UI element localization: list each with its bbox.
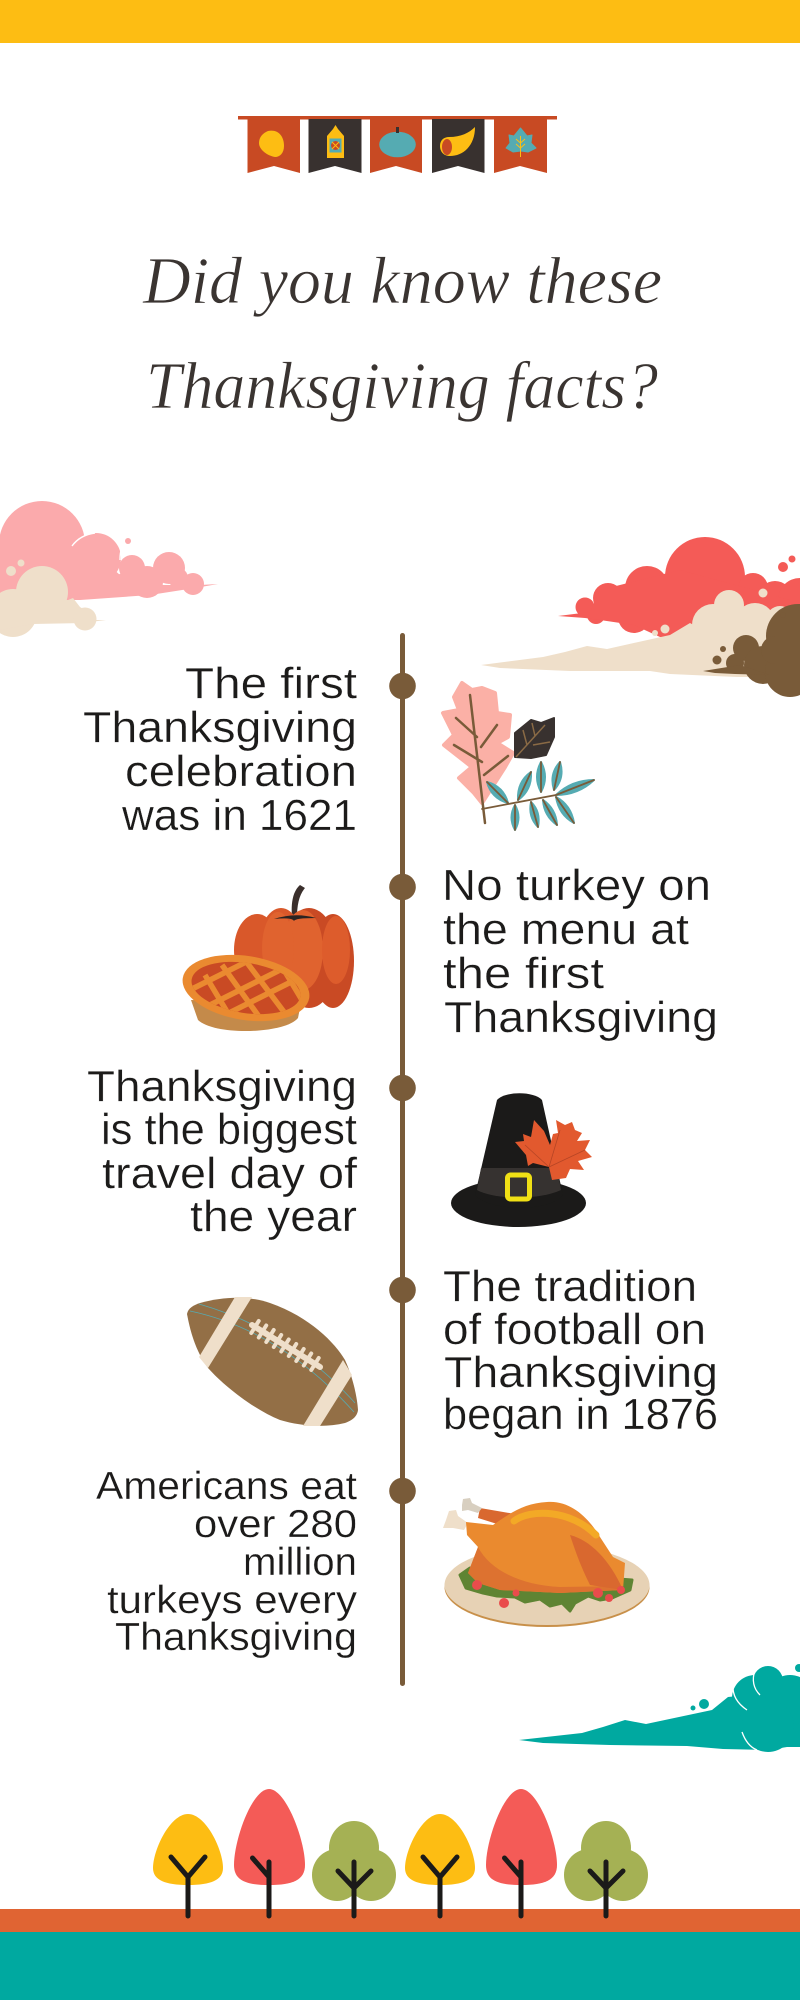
icon: pumpkin and pie xyxy=(178,885,354,1031)
fact 5 text xyxy=(96,1465,358,1659)
cloud: teal bottom right xyxy=(519,1664,800,1752)
flag: pumpkin xyxy=(370,119,422,173)
icon: autumn leaves xyxy=(443,683,594,830)
fact 3 text: is the biggest xyxy=(101,1105,357,1154)
fact 1 text: celebration xyxy=(125,747,357,796)
tree: green xyxy=(312,1821,396,1916)
icon: roast turkey on plate xyxy=(443,1498,650,1627)
fact 3 text xyxy=(87,1062,358,1241)
rear leg and bones xyxy=(478,1508,515,1528)
fact 5 text: million xyxy=(243,1541,357,1584)
bottom teal band xyxy=(0,1932,800,2000)
bottom orange stripe xyxy=(0,1909,800,1932)
pumpkin xyxy=(234,885,354,1008)
title: Thanksgiving facts? xyxy=(146,349,658,423)
fact 2 text: No turkey on xyxy=(442,861,711,910)
fact 5 text: Americans eat xyxy=(96,1465,357,1508)
flag: leaf xyxy=(494,119,547,173)
fact 5 text: Thanksgiving xyxy=(115,1616,357,1659)
fact 1 text: Thanksgiving xyxy=(83,703,357,752)
fact 3 text: the year xyxy=(190,1192,357,1241)
flag: cornucopia xyxy=(432,119,484,173)
cloud: red, cream and brown right xyxy=(481,537,800,697)
fact 4 text: of football on xyxy=(443,1305,706,1354)
berries xyxy=(472,1580,625,1608)
fact 2 text: Thanksgiving xyxy=(444,993,718,1042)
fact 1 text: was in 1621 xyxy=(121,791,357,840)
cloud: pink and cream left xyxy=(0,501,218,637)
tree: yellow xyxy=(153,1814,223,1916)
fact 5 text: turkeys every xyxy=(107,1579,358,1622)
fact 4 text xyxy=(443,1262,718,1439)
tree: red xyxy=(234,1789,305,1916)
fact 4 text: began in 1876 xyxy=(443,1390,718,1439)
icon: pilgrim hat with maple leaf xyxy=(451,1093,592,1227)
timeline line xyxy=(400,633,405,1686)
bunting banner xyxy=(238,116,557,173)
fact 1 text: The first xyxy=(185,659,357,708)
plate xyxy=(444,1545,650,1627)
title: Did you know these xyxy=(142,244,662,318)
timeline dots xyxy=(389,673,416,1504)
fact 2 text: the first xyxy=(443,949,604,998)
trees row xyxy=(153,1789,648,1916)
fact 2 text: the menu at xyxy=(443,905,689,954)
tree: red xyxy=(486,1789,557,1916)
fact 1 text xyxy=(83,659,357,840)
icon: football xyxy=(187,1297,358,1426)
title xyxy=(142,244,662,423)
fact 3 text: Thanksgiving xyxy=(87,1062,357,1111)
fact 4 text: Thanksgiving xyxy=(444,1348,718,1397)
fact 3 text: travel day of xyxy=(102,1149,358,1198)
tree: green xyxy=(564,1821,648,1916)
tree: yellow xyxy=(405,1814,475,1916)
fact 2 text xyxy=(442,861,718,1042)
fact 5 text: over 280 xyxy=(194,1503,357,1546)
flag: acorn xyxy=(248,119,300,173)
flag: lantern xyxy=(308,119,362,173)
fact 4 text: The tradition xyxy=(443,1262,697,1311)
pie xyxy=(182,954,310,1031)
top yellow band xyxy=(0,0,800,43)
garnish xyxy=(460,1568,632,1611)
turkey body xyxy=(466,1502,625,1593)
